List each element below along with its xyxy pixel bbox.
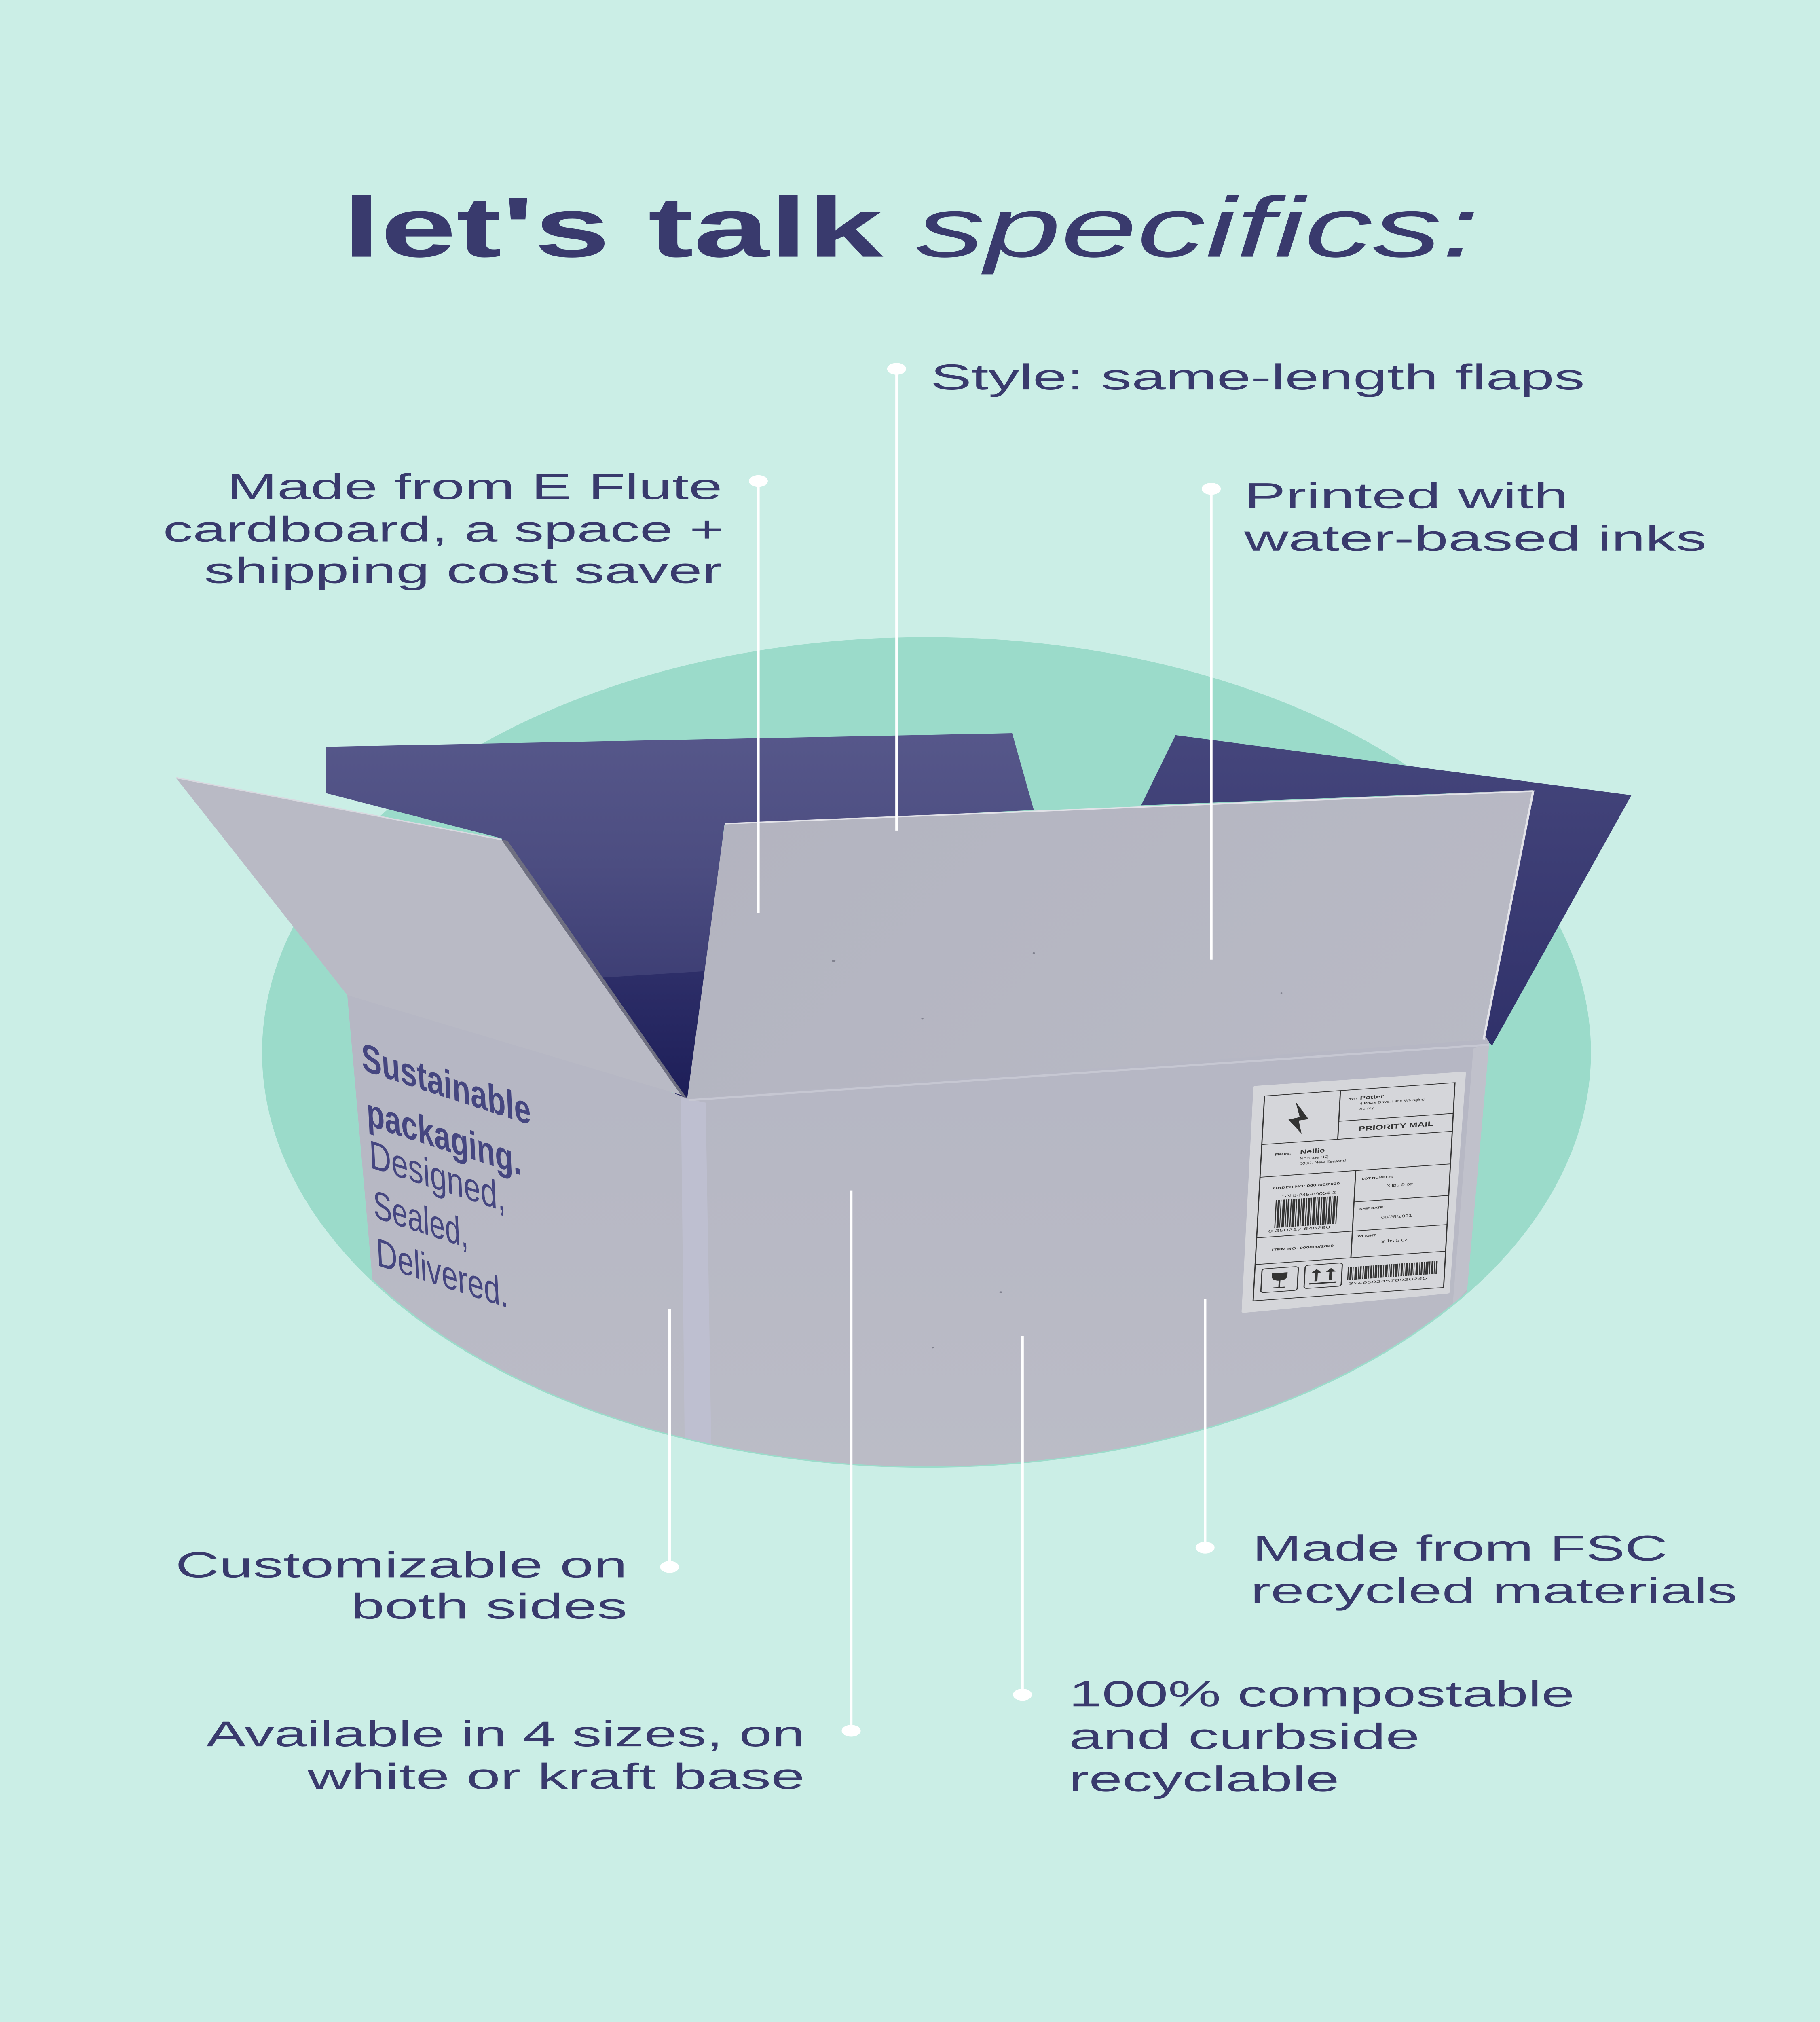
callout: E Flute cardboard: Made from E Flute [227,467,722,507]
callout: inks: water-based inks [1244,518,1706,558]
callout: inks: Printed with [1244,476,1568,516]
illustration: open cardboard box: packaging. [366,1089,522,1184]
shipping label [1244,1073,1464,1311]
label address text: 0000, New Zealand [1299,1159,1346,1166]
callout: FSC [1196,1299,1738,1611]
label address text: Noissue HQ [1300,1155,1329,1161]
label address text: Potter [1360,1093,1384,1101]
label grid [1253,1083,1455,1301]
icon: fragile glass [1261,1267,1298,1293]
title: let's talk [342,180,884,275]
callout: E Flute cardboard [163,467,768,913]
callout: sizes [206,1191,861,1797]
label barcode small [1348,1267,1437,1273]
box front fold crease [689,1045,1489,1100]
box interior back flap [326,733,1034,1098]
title [342,180,1480,275]
left side printed text: Designed, [368,1132,507,1220]
cardboard speckles [832,952,1283,1348]
icon: lightning bolt [1287,1101,1310,1135]
illustration: open cardboard box: Sustainable [360,1034,532,1134]
callout: customizable: both sides [351,1586,627,1626]
label address text [1265,1089,1437,1292]
box front wall [685,1025,1489,1483]
left side printed text: Delivered. [375,1229,509,1317]
box corner fold [681,1098,711,1444]
left side printed text [360,1034,532,1317]
title: specifics: [916,180,1480,275]
callout: sizes: white or kraft base [307,1756,805,1797]
callout: customizable: Customizable on [175,1545,627,1585]
label address text: FROM: [1275,1152,1291,1157]
left side printed text: Sealed, [372,1182,469,1257]
label address text: PRIORITY MAIL [1358,1120,1434,1133]
box left wall [347,995,685,1438]
label address text: 4 Privet Drive, Little Whinging, [1359,1098,1426,1106]
callout: E Flute cardboard: shipping cost saver [204,550,722,591]
callout: customizable [175,1309,679,1626]
callout: compostable: 100% compostable [1069,1674,1575,1714]
front flap [687,790,1533,1099]
callout: style [887,357,1585,831]
front flap top edge [725,791,1533,1039]
label address text: 08/25/2021 [1381,1213,1412,1220]
label address text: SHIP DATE: [1359,1206,1385,1210]
box interior right flap [1141,735,1632,1045]
box right seam [1453,1043,1489,1305]
label address text: 3 lbs 5 oz [1387,1182,1413,1188]
callout: inks [1202,476,1706,960]
label address text: 3 lbs 5 oz [1381,1237,1408,1244]
callout: sizes: Available in 4 sizes, on [206,1714,805,1754]
icon: this way up arrows [1304,1263,1342,1289]
left flap cut edge [501,840,687,1099]
callout: FSC: recycled materials [1251,1571,1738,1611]
background circle [262,637,1591,1468]
label paper [1244,1073,1464,1311]
label address text: 0 350217 648290 [1268,1225,1330,1233]
callout: compostable [1013,1336,1575,1799]
label address text: WEIGHT: [1357,1234,1377,1238]
label address text: Surrey [1359,1106,1374,1111]
left flap top edge [176,778,501,840]
label address text: ISN 8-245-89054-2 [1280,1190,1336,1199]
callout: compostable: recyclable [1069,1759,1339,1799]
label address text: 32465924578930245 [1349,1277,1427,1286]
box interior floor shadow [602,971,706,1099]
left flap [176,778,681,1095]
label address text: Nellie [1300,1147,1325,1155]
illustration: open cardboard box [176,733,1632,1483]
label address text: ITEM NO: 000000/2020 [1272,1244,1334,1252]
callout: style: Style: same-length flaps [931,357,1585,398]
label content frame [1253,1083,1455,1301]
label address text: TO: [1349,1098,1357,1101]
label address text: LOT NUMBER: [1361,1175,1393,1180]
callout: E Flute cardboard: cardboard, a space + [163,509,724,550]
callout: FSC: Made from FSC [1253,1528,1667,1568]
callout: compostable: and curbside [1069,1716,1420,1757]
label address text: ORDER NO: 000000/2020 [1273,1182,1340,1190]
label barcode large [1275,1210,1337,1214]
